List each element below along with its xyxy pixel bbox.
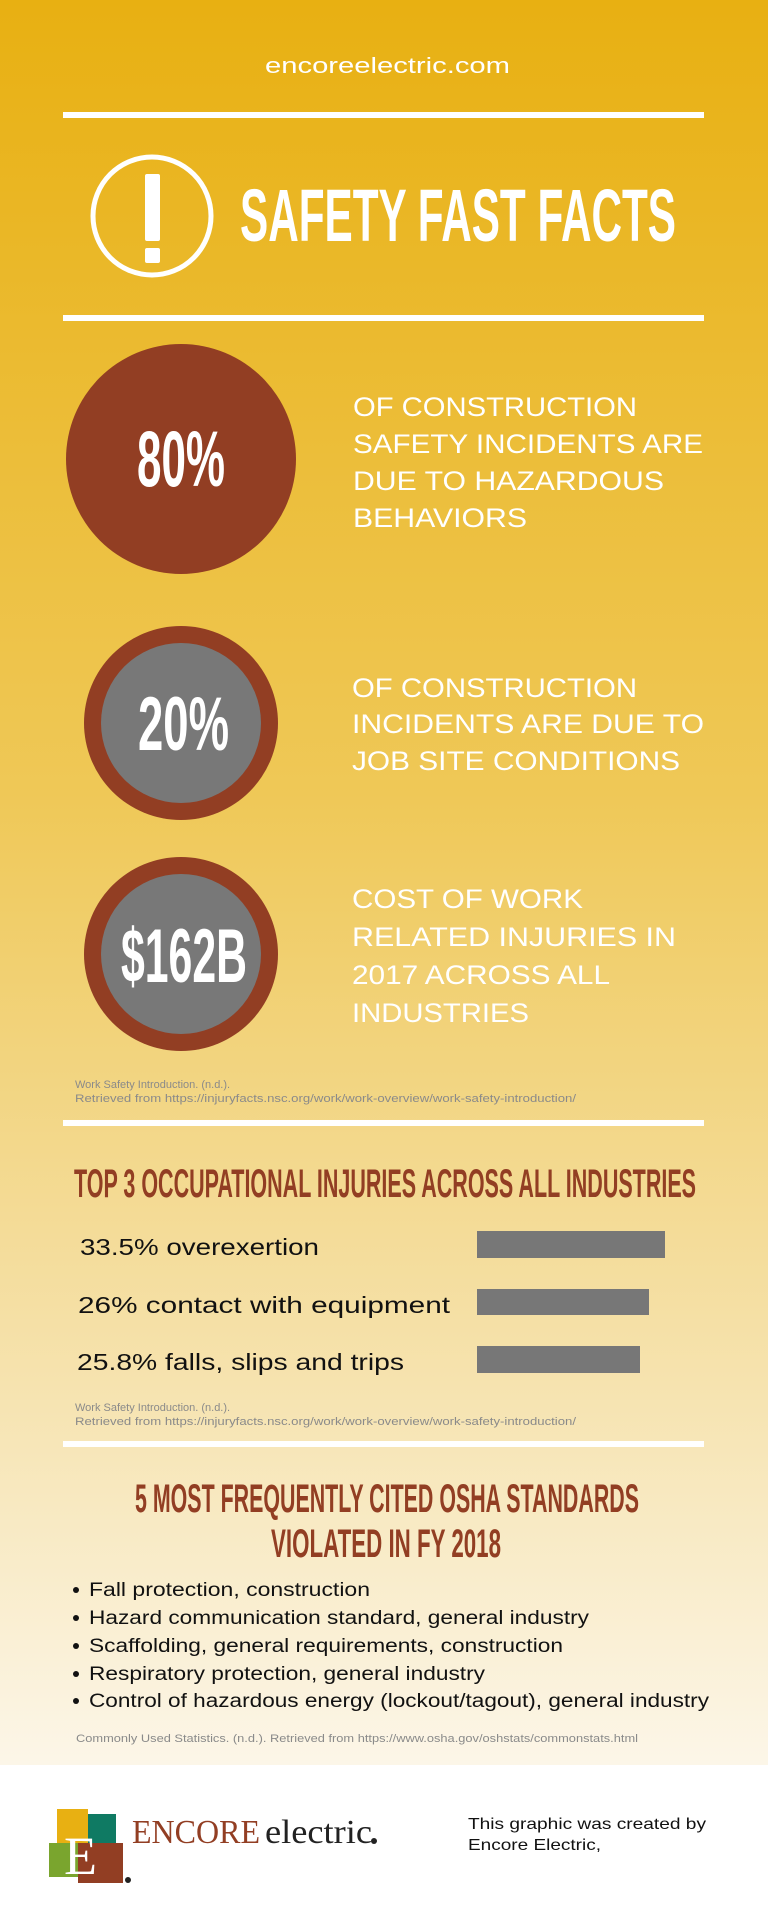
footer credit: This graphic was created by [468, 1816, 706, 1833]
text: 20% description: JOB SITE CONDITIONS [352, 746, 680, 776]
stat: 80%: 80% [137, 414, 225, 503]
stat: 20% [84, 626, 278, 820]
text: 20% description: OF CONSTRUCTION [352, 673, 637, 703]
logo: Encore Electric [49, 1809, 377, 1886]
text: 80% description: DUE TO HAZARDOUS [353, 466, 664, 496]
text: $162B description: RELATED INJURIES IN [352, 922, 676, 952]
stat: $162B [84, 857, 278, 1051]
text: 20% description: INCIDENTS ARE DUE TO [352, 709, 704, 739]
citation 2: Retrieved from https://injuryfacts.nsc.org/work/work-overview/work-safety-introduction/ [75, 1416, 577, 1428]
citation 1 [75, 1079, 577, 1105]
heading: OSHA standards [135, 1477, 639, 1566]
citation 2: Work Safety Introduction. (n.d.). [75, 1402, 230, 1414]
text: 80% description [353, 392, 703, 533]
stat: 80% [66, 344, 296, 574]
citation 1: Work Safety Introduction. (n.d.). [75, 1079, 230, 1091]
text: $162B description [352, 884, 676, 1028]
text: 80% description: OF CONSTRUCTION [353, 392, 637, 422]
citation 3: Commonly Used Statistics. (n.d.). Retrieved from https://www.osha.gov/oshstats/commonstats.html [76, 1733, 638, 1745]
bar chart: injuries: 33.5% overexertion [80, 1234, 319, 1260]
text: $162B description: INDUSTRIES [352, 998, 529, 1028]
text: $162B description: 2017 ACROSS ALL [352, 960, 610, 990]
logo: Encore Electric: E [64, 1826, 97, 1886]
bar chart: injuries [77, 1231, 665, 1375]
list: OSHA violations: Scaffolding, general requirements, construction [89, 1636, 563, 1657]
website url: encoreelectric.com [265, 53, 510, 78]
text: 80% description: SAFETY INCIDENTS ARE [353, 429, 703, 459]
logo: Encore Electric: electric [265, 1814, 372, 1851]
bar chart: injuries: 25.8% falls, slips and trips [77, 1349, 404, 1375]
text: 80% description: BEHAVIORS [353, 503, 527, 533]
stat: 20%: 20% [138, 682, 229, 767]
stat: $162B: $162B [121, 914, 247, 999]
bar chart: injuries: 26% contact with equipment [78, 1292, 451, 1318]
list: OSHA violations: Hazard communication standard, general industry [89, 1608, 590, 1629]
text: 20% description [352, 673, 704, 776]
icon: exclamation circle [93, 157, 211, 275]
logo: Encore Electric: ENCORE [132, 1814, 260, 1851]
footer credit [468, 1816, 706, 1854]
list: OSHA violations: Fall protection, construction [89, 1580, 370, 1601]
list: OSHA violations: Respiratory protection, general industry [89, 1664, 486, 1685]
list: OSHA violations: Control of hazardous energy (lockout/tagout), general industry [89, 1691, 710, 1712]
heading: OSHA standards: VIOLATED IN FY 2018 [271, 1522, 501, 1566]
citation 2 [75, 1402, 577, 1428]
list: OSHA violations [73, 1580, 710, 1712]
citation 1: Retrieved from https://injuryfacts.nsc.org/work/work-overview/work-safety-introduction/ [75, 1093, 577, 1105]
text: $162B description: COST OF WORK [352, 884, 583, 914]
footer credit: Encore Electric, [468, 1837, 601, 1854]
